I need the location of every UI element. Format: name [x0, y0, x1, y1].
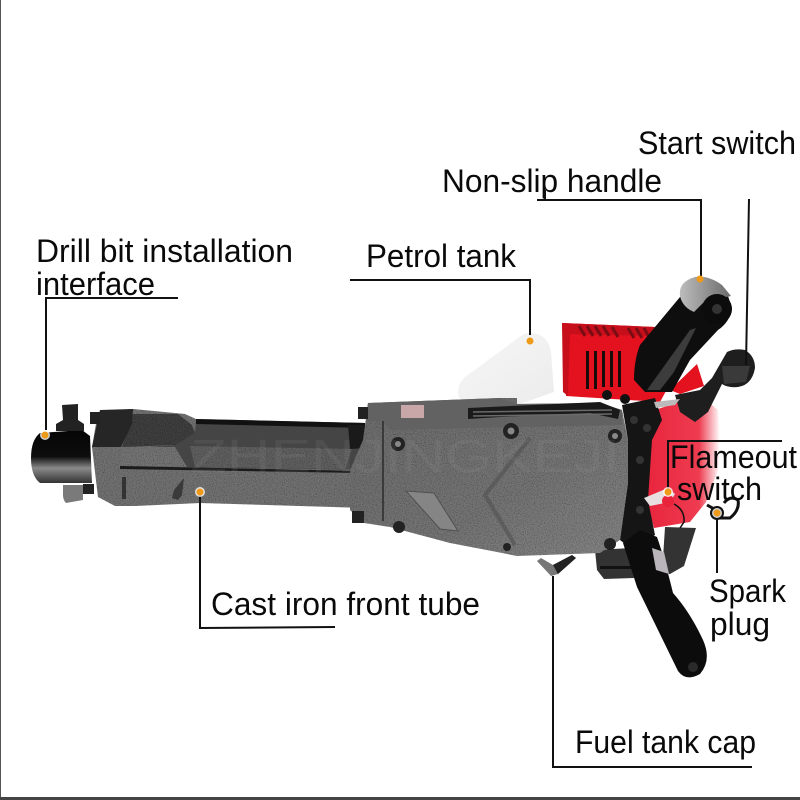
- chuck: [31, 430, 92, 483]
- label: spark plug: [709, 508, 787, 642]
- spark plug wire: [707, 498, 738, 520]
- red lower engine body: [645, 395, 720, 528]
- label: flameout switch: Flameout: [670, 439, 797, 475]
- flange bolts: [90, 412, 100, 424]
- petrol tank body: [458, 333, 554, 404]
- front flange block: [92, 409, 133, 447]
- label: drill bit installation interface: Drill bit installation: [36, 233, 293, 269]
- tube upper channel: [122, 420, 365, 470]
- label: petrol tank: Petrol tank: [366, 238, 517, 274]
- label: non-slip handle: Non-slip handle: [442, 163, 662, 199]
- label: cast iron front tube: [195, 487, 480, 628]
- black mounting plate: [620, 398, 662, 548]
- fuel tank cap icon: [537, 555, 576, 576]
- rear housing: [350, 398, 628, 556]
- start switch lever: [654, 349, 755, 422]
- label: spark plug: plug: [710, 606, 770, 642]
- label: flameout switch: switch: [677, 471, 762, 507]
- label: start switch: [638, 125, 796, 365]
- housing bolts: [391, 437, 405, 451]
- rear grey cylinder block: [595, 527, 696, 579]
- label: drill bit installation interface: interface: [36, 266, 155, 302]
- tube full silhouette: [92, 409, 365, 508]
- lower handle: [623, 530, 707, 677]
- label: spark plug: Spark: [709, 573, 787, 609]
- non-slip upper handle: [634, 277, 732, 392]
- red engine cover: [562, 323, 704, 404]
- label: start switch: Start switch: [638, 125, 796, 161]
- label: petrol tank: [350, 238, 534, 344]
- label: flameout switch: [663, 439, 797, 507]
- watermark: ZHENJINGKEJI: [190, 430, 620, 482]
- label: drill bit installation interface: [36, 233, 293, 440]
- top knob: [56, 404, 84, 431]
- label: fuel tank cap: Fuel tank cap: [575, 724, 756, 760]
- label: non-slip handle: [442, 163, 704, 282]
- flameout switch bracket: [644, 488, 684, 528]
- front tube assembly: [31, 404, 366, 508]
- lower pin: [63, 485, 83, 503]
- label: fuel tank cap: [553, 576, 756, 767]
- label: cast iron front tube: Cast iron front tube: [211, 586, 480, 622]
